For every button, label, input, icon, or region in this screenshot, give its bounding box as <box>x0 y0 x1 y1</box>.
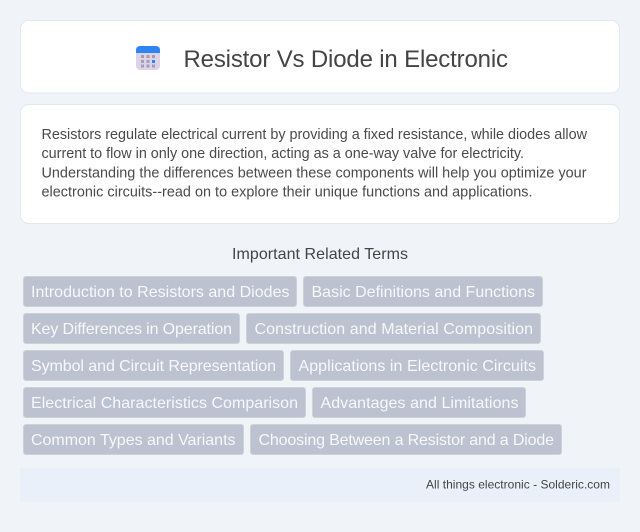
chip: electrical characteristics: Electrical Characteristics Comparison <box>31 395 298 412</box>
footer bar <box>20 468 620 502</box>
chip: common types <box>24 424 244 454</box>
icon: calendar grid <box>136 46 160 70</box>
footer bar: All things electronic - Solderic.com <box>426 478 610 492</box>
title: Resistor Vs Diode in Electronic <box>184 46 508 73</box>
chip: common types: Common Types and Variants <box>31 432 236 449</box>
chip: advantages <box>312 388 526 418</box>
chip group: related terms <box>24 276 562 454</box>
chip: electrical characteristics <box>24 388 306 418</box>
chip: construction <box>246 314 540 344</box>
panel: intro text card: current to flow in only one direction, acting as a one-way valve for electricity. <box>42 146 524 162</box>
chip: introduction: Introduction to Resistors and Diodes <box>31 284 290 301</box>
chip: advantages: Advantages and Limitations <box>320 395 518 412</box>
chip: symbol: Symbol and Circuit Representation <box>31 358 276 375</box>
panel: intro text card <box>20 104 620 224</box>
panel: intro text card: electronic circuits--read on to explore their unique functions and applications. <box>42 185 532 201</box>
chip: choosing <box>250 424 562 454</box>
chip: choosing: Choosing Between a Resistor and a Diode <box>258 432 554 449</box>
chip: construction: Construction and Material Composition <box>254 321 533 338</box>
chip: basic definitions <box>304 276 542 306</box>
panel: intro text card: Resistors regulate electrical current by providing a fixed resistance, while diodes allow <box>42 127 588 143</box>
panel: header card <box>20 20 620 93</box>
panel: intro text card: Understanding the differences between these components will help you optimize your <box>42 166 587 182</box>
chip: applications: Applications in Electronic Circuits <box>298 358 536 375</box>
chip: basic definitions: Basic Definitions and Functions <box>312 284 535 301</box>
chip: introduction <box>24 276 296 306</box>
chip: symbol <box>24 350 284 380</box>
chip: key differences: Key Differences in Operation <box>31 321 232 338</box>
heading: related terms: Important Related Terms <box>232 246 408 263</box>
chip: applications <box>290 350 544 380</box>
chip: key differences <box>24 314 240 344</box>
